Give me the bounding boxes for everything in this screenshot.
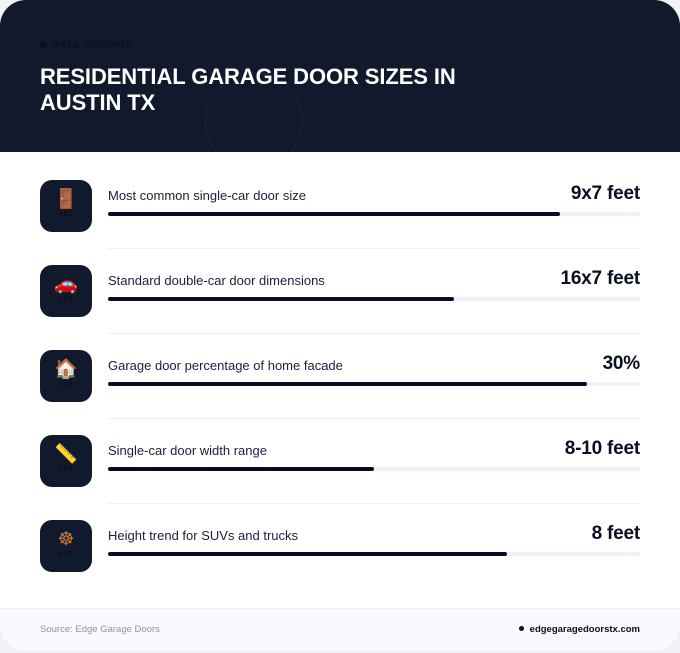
row 4 <box>40 435 640 487</box>
icon: car <box>40 265 92 317</box>
title: AUSTIN TX <box>40 90 155 115</box>
footer <box>0 608 680 651</box>
bar <box>108 382 640 386</box>
icon: car: 🚗 <box>54 274 78 295</box>
icon: ruler: #04 <box>59 466 73 473</box>
value: 9x7 feet <box>571 183 640 204</box>
icon: wheel <box>40 520 92 572</box>
icon: car: #02 <box>59 296 73 303</box>
header <box>0 0 680 152</box>
icon: house: 🏠 <box>54 359 78 380</box>
value: 8 feet <box>592 523 640 544</box>
source: Source: Edge Garage Doors <box>40 624 160 635</box>
title <box>40 64 456 115</box>
title: RESIDENTIAL GARAGE DOOR SIZES IN <box>40 64 456 89</box>
value: 30% <box>603 353 640 374</box>
bar <box>108 552 640 556</box>
icon: ruler: 📏 <box>54 444 78 465</box>
row 2 <box>40 265 640 317</box>
icon: door: 🚪 <box>54 189 78 210</box>
bar <box>108 212 640 216</box>
label: Height trend for SUVs and trucks <box>108 528 298 543</box>
icon: door: #01 <box>59 211 73 218</box>
url: edgegaragedoorstx.com <box>530 624 640 635</box>
bar <box>108 467 640 471</box>
value: 16x7 feet <box>560 268 640 289</box>
icon: door <box>40 180 92 232</box>
row 3 <box>40 350 640 402</box>
icon: wheel: ☸ <box>57 529 75 550</box>
label: Garage door percentage of home facade <box>108 358 343 373</box>
row 1 <box>40 180 640 232</box>
bar <box>108 297 640 301</box>
value: 8-10 feet <box>565 438 640 459</box>
icon: house: #03 <box>59 381 73 388</box>
label: Most common single-car door size <box>108 188 306 203</box>
icon: ruler <box>40 435 92 487</box>
label: Single-car door width range <box>108 443 267 458</box>
label: Standard double-car door dimensions <box>108 273 325 288</box>
icon: house <box>40 350 92 402</box>
row 5 <box>40 520 640 572</box>
kicker: DATA INSIGHTS <box>52 40 133 50</box>
icon: wheel: #05 <box>59 551 73 558</box>
